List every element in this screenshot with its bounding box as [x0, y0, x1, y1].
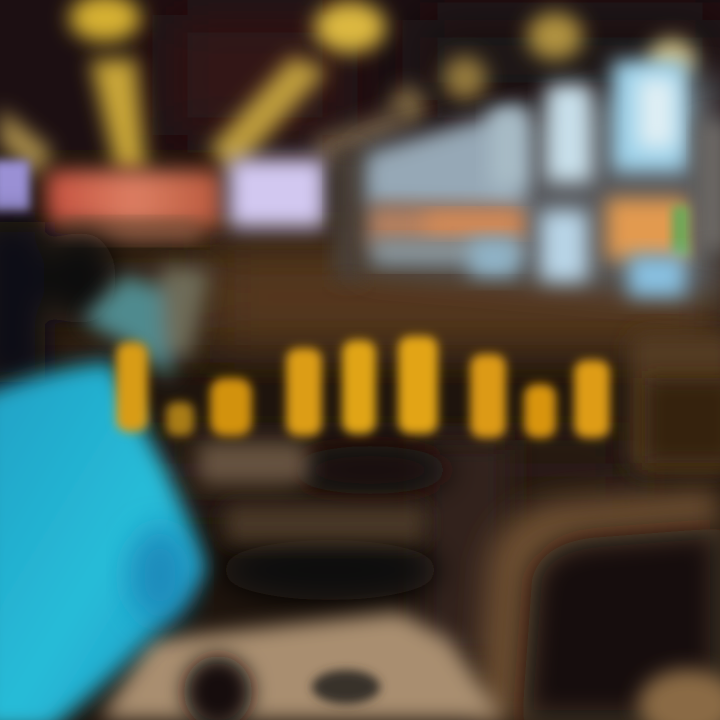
object on table: [184, 656, 252, 720]
dark puck on table: [312, 670, 380, 704]
wide grey screens: [366, 108, 525, 210]
table top middle: [225, 505, 425, 543]
right booth seat: [478, 488, 720, 720]
table top upper: [198, 442, 308, 484]
right upper booth: [630, 332, 720, 472]
bright screens: [546, 84, 592, 182]
red sign strip: [46, 170, 222, 228]
screen wall backing: [360, 70, 720, 300]
purple screen centre: [228, 158, 326, 228]
row of yellow glasses: [116, 336, 610, 438]
ceiling light beams: [0, 56, 405, 178]
teal sleeve: [82, 265, 210, 380]
purple screen left: [0, 160, 30, 212]
cyan foreground shape: [0, 362, 205, 720]
screens and signage row: [0, 60, 720, 300]
lower furniture: [100, 332, 720, 720]
foreground table: [100, 612, 505, 720]
person silhouette left: [0, 222, 116, 382]
pillar: [334, 150, 364, 280]
dark gaps below glasses: [290, 446, 450, 494]
ceiling lights: [69, 0, 696, 126]
bottom-right chair: [638, 669, 720, 720]
